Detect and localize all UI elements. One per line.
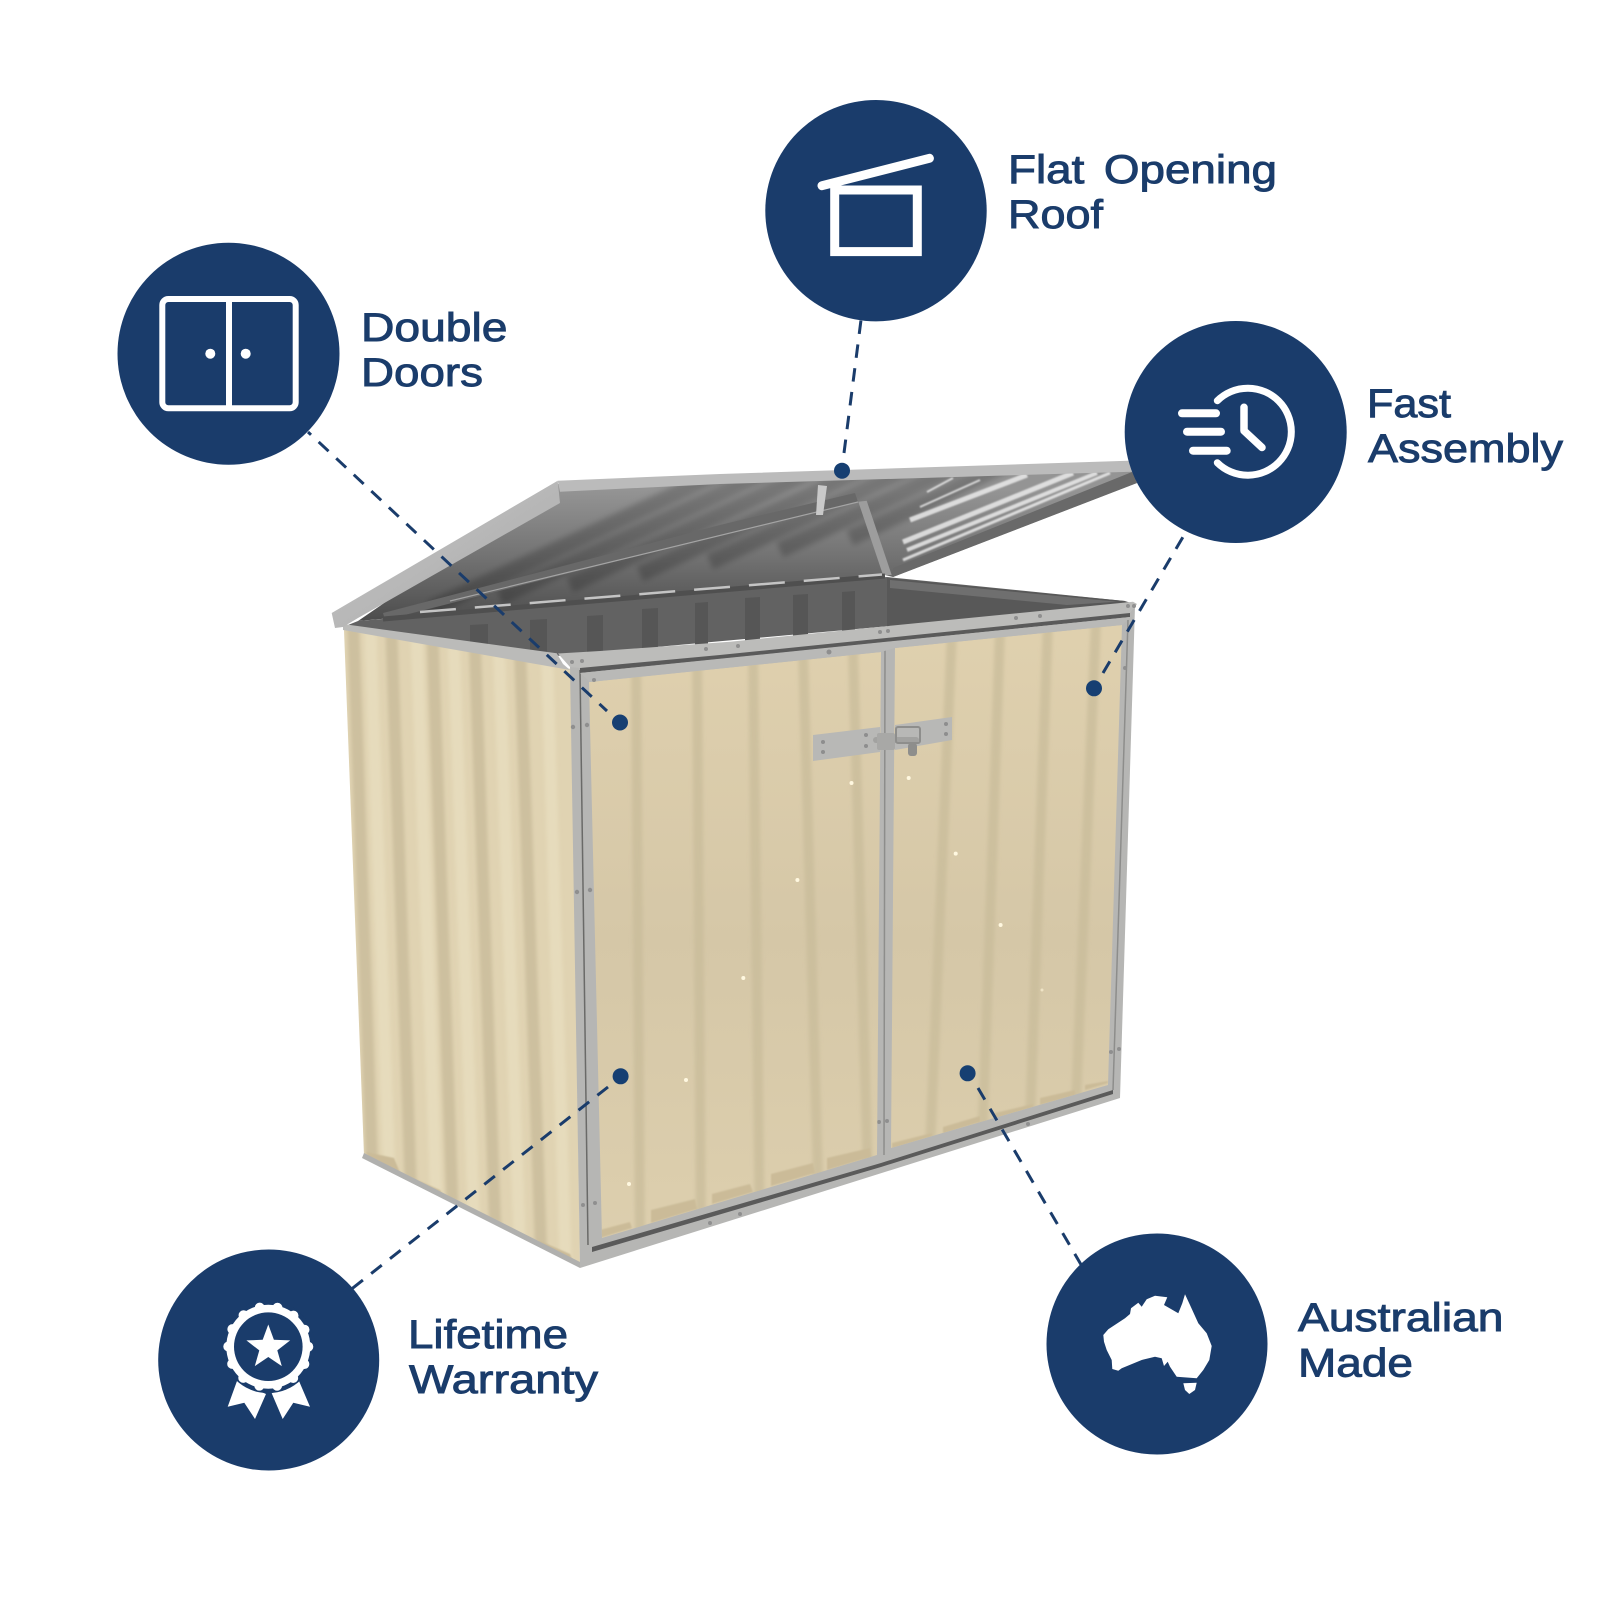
infographic canvas [118, 100, 1564, 1470]
label: lifetime warranty [408, 1313, 598, 1402]
icon: map of australia [1103, 1294, 1212, 1394]
label: lifetime warranty: Lifetime [408, 1313, 568, 1357]
label: flat opening roof: Flat Opening [1008, 148, 1277, 192]
label: lifetime warranty: Warranty [409, 1358, 598, 1402]
shed interior [343, 574, 1134, 656]
callout: lifetime warranty [158, 1250, 598, 1470]
icon: open roof box [822, 158, 929, 252]
label: australian made: Australian [1298, 1296, 1504, 1340]
leader line: flat opening roof [834, 320, 861, 479]
lid underside [358, 472, 1137, 621]
icon: award rosette [222, 1300, 315, 1419]
label: fast assembly: Assembly [1368, 427, 1563, 471]
label: double doors: Double [361, 306, 508, 350]
door hasp and latch [813, 717, 952, 761]
shed illustration [332, 402, 1145, 1280]
label: double doors [361, 306, 508, 395]
label: flat opening roof [1008, 148, 1277, 237]
leader line: lifetime warranty [349, 1068, 629, 1291]
label: australian made: Made [1298, 1342, 1413, 1386]
callout: fast assembly [1125, 321, 1563, 543]
callout: flat opening roof [765, 100, 1277, 321]
side wall [344, 620, 580, 1280]
leader line: fast assembly [1086, 525, 1190, 696]
icon: fast clock [1182, 388, 1291, 475]
label: flat opening roof: Roof [1008, 193, 1104, 237]
label: double doors: Doors [361, 351, 483, 395]
callout: double doors [118, 243, 508, 465]
lid outer edge [332, 461, 1145, 628]
top rail [343, 602, 1137, 682]
icon: double doors [162, 299, 296, 408]
front frame [570, 606, 1135, 1268]
left door [589, 650, 881, 1250]
leader line: double doors [308, 432, 628, 730]
callout: australian made [1046, 1234, 1504, 1454]
label: fast assembly [1367, 382, 1563, 471]
right door [891, 620, 1122, 1150]
label: fast assembly: Fast [1367, 382, 1451, 426]
label: australian made [1298, 1296, 1504, 1386]
leader line: australian made [960, 1065, 1083, 1268]
